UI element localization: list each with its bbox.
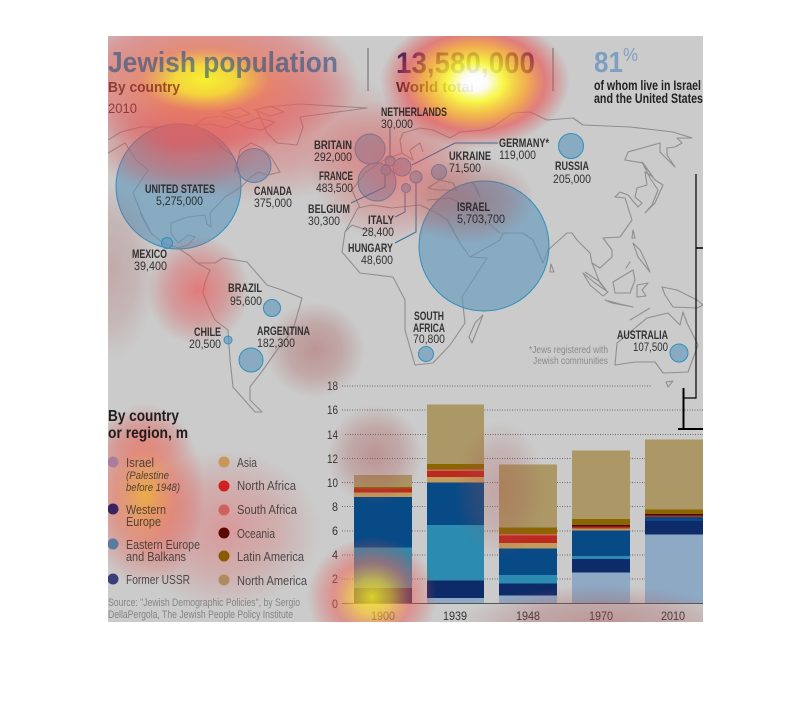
country labels xyxy=(132,105,668,354)
country labels: AFRICA xyxy=(413,321,445,335)
title xyxy=(108,51,336,113)
axis gridlines and labels: 2 xyxy=(332,572,338,586)
world total figure: 13,580,000 xyxy=(396,47,535,80)
country labels: 48,600 xyxy=(361,253,393,267)
population bubbles xyxy=(116,124,688,372)
axis gridlines and labels: 10 xyxy=(327,476,338,490)
country labels: 107,500 xyxy=(633,340,668,354)
legend labels: Israel xyxy=(126,456,154,470)
footnote xyxy=(529,346,608,364)
axis gridlines and labels: 18 xyxy=(327,379,338,393)
share figure: and the United States xyxy=(594,91,703,106)
year labels: 1900 xyxy=(371,609,395,623)
country labels: UNITED STATES xyxy=(145,182,215,196)
bar 1939 xyxy=(427,404,484,604)
panel background xyxy=(108,36,703,622)
country labels: FRANCE xyxy=(319,169,353,183)
country labels: 28,400 xyxy=(362,225,394,239)
country labels: BELGIUM xyxy=(308,202,350,216)
axis gridlines and labels: 16 xyxy=(327,403,338,417)
legend labels: North Africa xyxy=(237,479,296,493)
share figure: 81 xyxy=(594,47,623,79)
legend xyxy=(108,408,307,588)
axis gridlines and labels: 4 xyxy=(332,548,338,562)
share figure: % xyxy=(623,45,638,65)
country labels: 95,600 xyxy=(230,294,262,308)
year labels: 1970 xyxy=(589,609,613,623)
country labels: MEXICO xyxy=(132,247,167,261)
country labels: CANADA xyxy=(254,184,292,198)
country labels: ITALY xyxy=(368,213,394,227)
legend labels: South Africa xyxy=(237,503,297,517)
year labels xyxy=(372,612,685,620)
country labels: BRAZIL xyxy=(228,281,262,295)
share figure xyxy=(594,48,702,103)
country labels: 70,800 xyxy=(413,332,445,346)
footnote: *Jews registered with xyxy=(529,344,608,356)
country labels: 30,300 xyxy=(308,214,340,228)
axis gridlines and labels: 14 xyxy=(327,428,338,442)
legend labels: Asia xyxy=(237,456,257,470)
year labels: 2010 xyxy=(661,609,685,623)
country labels: 20,500 xyxy=(189,337,221,351)
country labels: RUSSIA xyxy=(555,159,589,173)
legend labels xyxy=(126,456,307,588)
stacked bar chart xyxy=(327,379,703,623)
world total figure xyxy=(396,52,534,92)
legend labels: Western xyxy=(126,503,166,517)
legend labels: Oceania xyxy=(237,527,275,541)
country labels: 39,400 xyxy=(134,259,167,273)
country labels: BRITAIN xyxy=(314,138,352,152)
axis gridlines and labels: 6 xyxy=(332,524,338,538)
country labels: 119,000 xyxy=(499,148,536,162)
country labels: 375,000 xyxy=(254,196,292,210)
footnote: Jewish communities xyxy=(533,355,608,367)
axis gridlines and labels: 8 xyxy=(332,500,338,514)
country labels: 205,000 xyxy=(553,172,591,186)
share figure: of whom live in Israel xyxy=(594,78,701,93)
title: 2010 xyxy=(108,100,137,116)
legend heading: By country xyxy=(108,408,179,425)
country labels: 182,300 xyxy=(257,336,295,350)
source note xyxy=(108,597,300,621)
country labels: GERMANY* xyxy=(499,136,549,150)
world map outline xyxy=(108,104,703,412)
bar 1948 xyxy=(499,464,557,604)
bar 1970 xyxy=(572,450,630,604)
country labels: ARGENTINA xyxy=(257,324,310,338)
bar 2010 xyxy=(645,440,703,604)
axis gridlines and labels: 12 xyxy=(327,452,338,466)
country labels: HUNGARY xyxy=(348,241,393,255)
legend labels: Eastern Europe xyxy=(126,538,200,552)
legend labels: Europe xyxy=(126,515,161,529)
legend labels: Former USSR xyxy=(126,573,190,587)
title: Jewish population xyxy=(108,47,338,79)
title: By country xyxy=(108,79,181,96)
country labels: 5,703,700 xyxy=(457,212,505,226)
legend labels: before 1948) xyxy=(126,482,180,494)
source note: Source: "Jewish Demographic Policies", by Sergio xyxy=(108,597,300,609)
country labels: SOUTH xyxy=(414,309,444,323)
country labels: AUSTRALIA xyxy=(617,328,668,342)
legend labels: and Balkans xyxy=(126,550,186,564)
year labels: 1939 xyxy=(443,609,467,623)
heatmap overlay xyxy=(108,36,703,622)
legend labels: Latin America xyxy=(237,550,304,564)
leader lines xyxy=(351,128,498,243)
country labels: 71,500 xyxy=(449,161,481,175)
legend heading xyxy=(108,408,188,442)
country labels: UKRAINE xyxy=(449,149,491,163)
country labels: 483,500 xyxy=(316,181,353,195)
year labels: 1948 xyxy=(516,609,540,623)
country labels: 292,000 xyxy=(314,150,352,164)
country labels: ISRAEL xyxy=(457,200,490,214)
source note: DellaPergola, The Jewish People Policy Institute xyxy=(108,609,293,621)
country labels: CHILE xyxy=(194,325,221,339)
bar 1900 xyxy=(354,475,412,604)
axis gridlines and labels xyxy=(327,379,703,611)
legend heading: or region, m xyxy=(108,425,188,442)
country labels: 30,000 xyxy=(381,117,413,131)
country labels: NETHERLANDS xyxy=(381,105,447,119)
legend dots xyxy=(108,456,230,586)
legend labels: North America xyxy=(237,574,307,588)
legend labels: (Palestine xyxy=(126,470,169,482)
world total figure: World total xyxy=(396,79,474,96)
axis gridlines and labels: 0 xyxy=(332,597,338,611)
country labels: 5,275,000 xyxy=(156,194,203,208)
black bracket lines xyxy=(678,174,703,429)
